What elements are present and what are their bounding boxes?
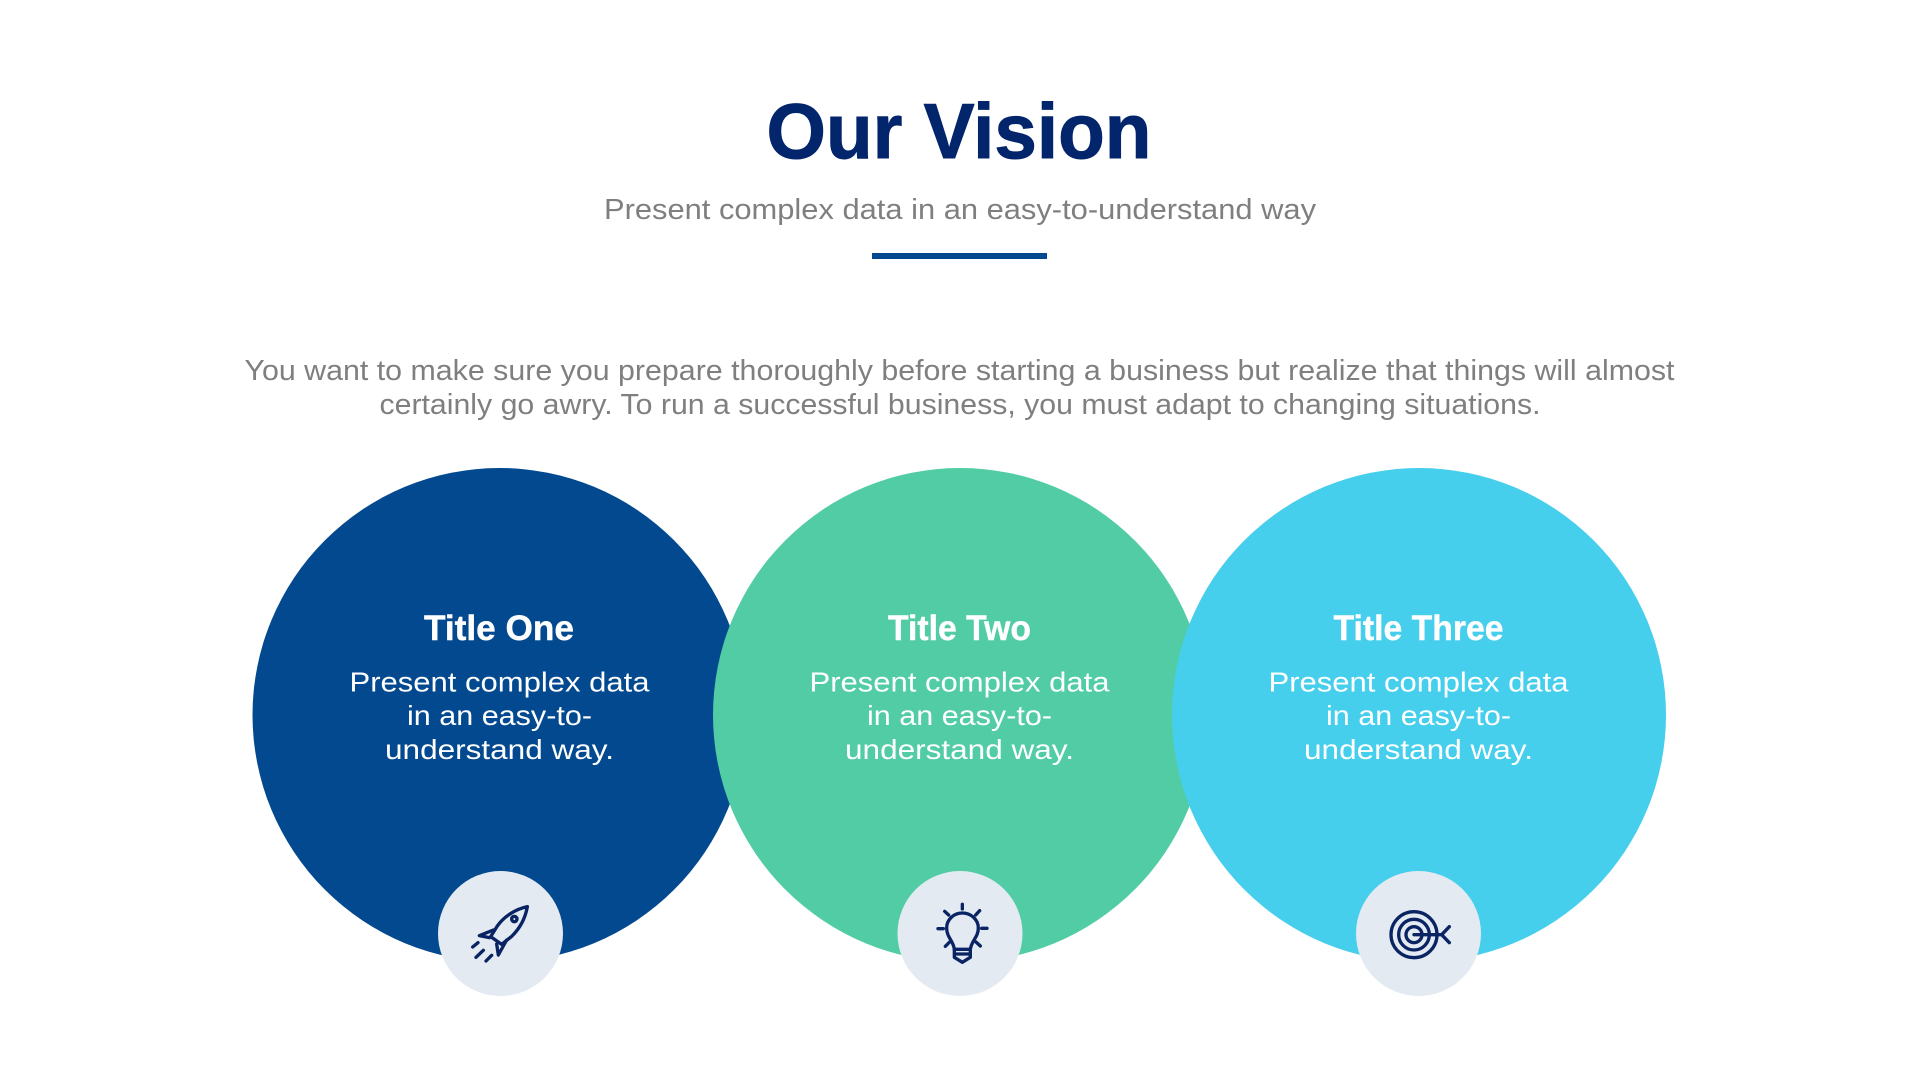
- text: title one body: in an easy-to-: [407, 700, 592, 731]
- text: title two body: in an easy-to-: [867, 700, 1052, 731]
- icon badge: rocket: [438, 871, 563, 996]
- panel: title one: [252, 468, 746, 962]
- icon: light bulb: [938, 904, 987, 962]
- icon: rocket: [473, 907, 527, 961]
- heading: title three: Title Three: [1334, 609, 1504, 648]
- text: title three body: [1268, 666, 1569, 765]
- text: title three body: understand way.: [1304, 734, 1533, 765]
- text: title one body: Present complex data: [350, 666, 650, 698]
- text: title one body: [350, 666, 650, 765]
- text: title three body: in an easy-to-: [1326, 700, 1511, 731]
- panel: title three: [1172, 468, 1666, 962]
- text: title two body: understand way.: [845, 734, 1074, 765]
- text: title two body: Present complex data: [810, 666, 1110, 698]
- panel: title two: [713, 468, 1207, 962]
- title underline: [872, 253, 1047, 259]
- intro paragraph: [244, 355, 1674, 421]
- icon badge: target: [1356, 871, 1481, 996]
- text: title two body: [810, 666, 1110, 765]
- title: Our Vision: [766, 87, 1152, 175]
- icon badge: light bulb: [898, 871, 1022, 996]
- intro paragraph: You want to make sure you prepare thoroughly before starting a business but realize that things will almost: [244, 355, 1674, 387]
- text: title three body: Present complex data: [1268, 666, 1569, 698]
- subtitle: Present complex data in an easy-to-understand way: [604, 194, 1317, 226]
- heading: title one: Title One: [424, 609, 574, 648]
- heading: title two: Title Two: [888, 609, 1031, 648]
- intro paragraph: certainly go awry. To run a successful business, you must adapt to changing situations.: [380, 389, 1540, 421]
- text: title one body: understand way.: [385, 734, 614, 765]
- icon: target: [1391, 912, 1449, 958]
